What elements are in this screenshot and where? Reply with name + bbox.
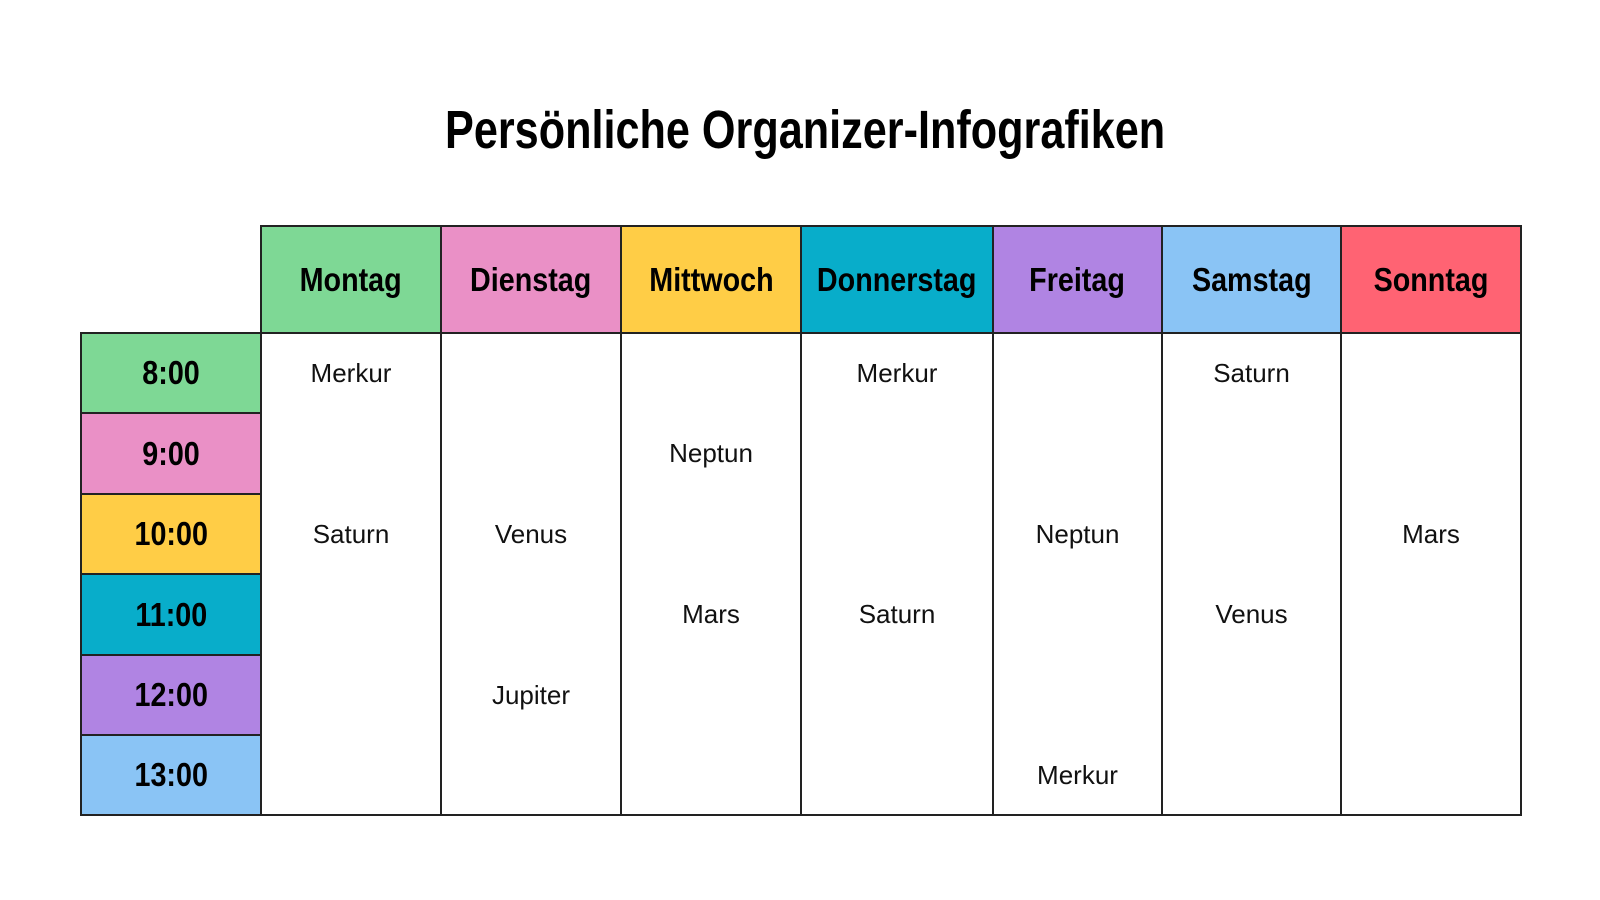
title: Persönliche Organizer-Infografiken — [445, 100, 1165, 160]
header: Montag: Montag — [300, 260, 402, 298]
header: Donnerstag — [800, 225, 994, 334]
time: 10:00 — [80, 493, 262, 575]
header: Sonntag — [1340, 225, 1522, 334]
header: Samstag — [1161, 225, 1342, 334]
header: Mittwoch: Mittwoch — [649, 260, 773, 298]
header: Sonntag: Sonntag — [1374, 260, 1488, 298]
table: Jupiter — [492, 680, 570, 710]
table: Saturn — [859, 598, 935, 628]
time: 12:00: 12:00 — [134, 676, 208, 713]
header: Freitag — [992, 225, 1163, 334]
header: Montag — [260, 225, 442, 334]
time: 13:00 — [80, 734, 262, 816]
time: 11:00 — [80, 573, 262, 656]
time: 11:00: 11:00 — [135, 596, 207, 632]
table: Neptun — [1036, 518, 1119, 548]
time: 9:00: 9:00 — [142, 434, 200, 472]
table — [80, 225, 1522, 816]
table: Venus — [495, 518, 567, 548]
time: 9:00 — [80, 412, 262, 495]
table: Saturn — [1213, 358, 1290, 388]
time: 13:00: 13:00 — [134, 756, 208, 793]
entries: Merkur — [311, 358, 391, 388]
table: Neptun — [669, 438, 753, 468]
table: Merkur — [857, 358, 937, 388]
table: Mars — [1402, 518, 1460, 548]
header: Mittwoch — [620, 225, 802, 334]
header: Samstag: Samstag — [1192, 260, 1311, 298]
body columns — [260, 332, 442, 816]
time: 8:00 — [80, 332, 262, 414]
table: Mars — [682, 598, 740, 628]
header: Donnerstag: Donnerstag — [817, 260, 977, 298]
table: Venus — [1215, 598, 1288, 628]
time: 10:00: 10:00 — [134, 515, 208, 552]
table: Saturn — [313, 518, 389, 548]
header: Dienstag: Dienstag — [470, 260, 592, 298]
time: 8:00: 8:00 — [142, 354, 200, 391]
header: Freitag: Freitag — [1030, 260, 1125, 298]
table: Merkur — [1037, 760, 1118, 790]
header: Dienstag — [440, 225, 622, 334]
time: 12:00 — [80, 654, 262, 736]
